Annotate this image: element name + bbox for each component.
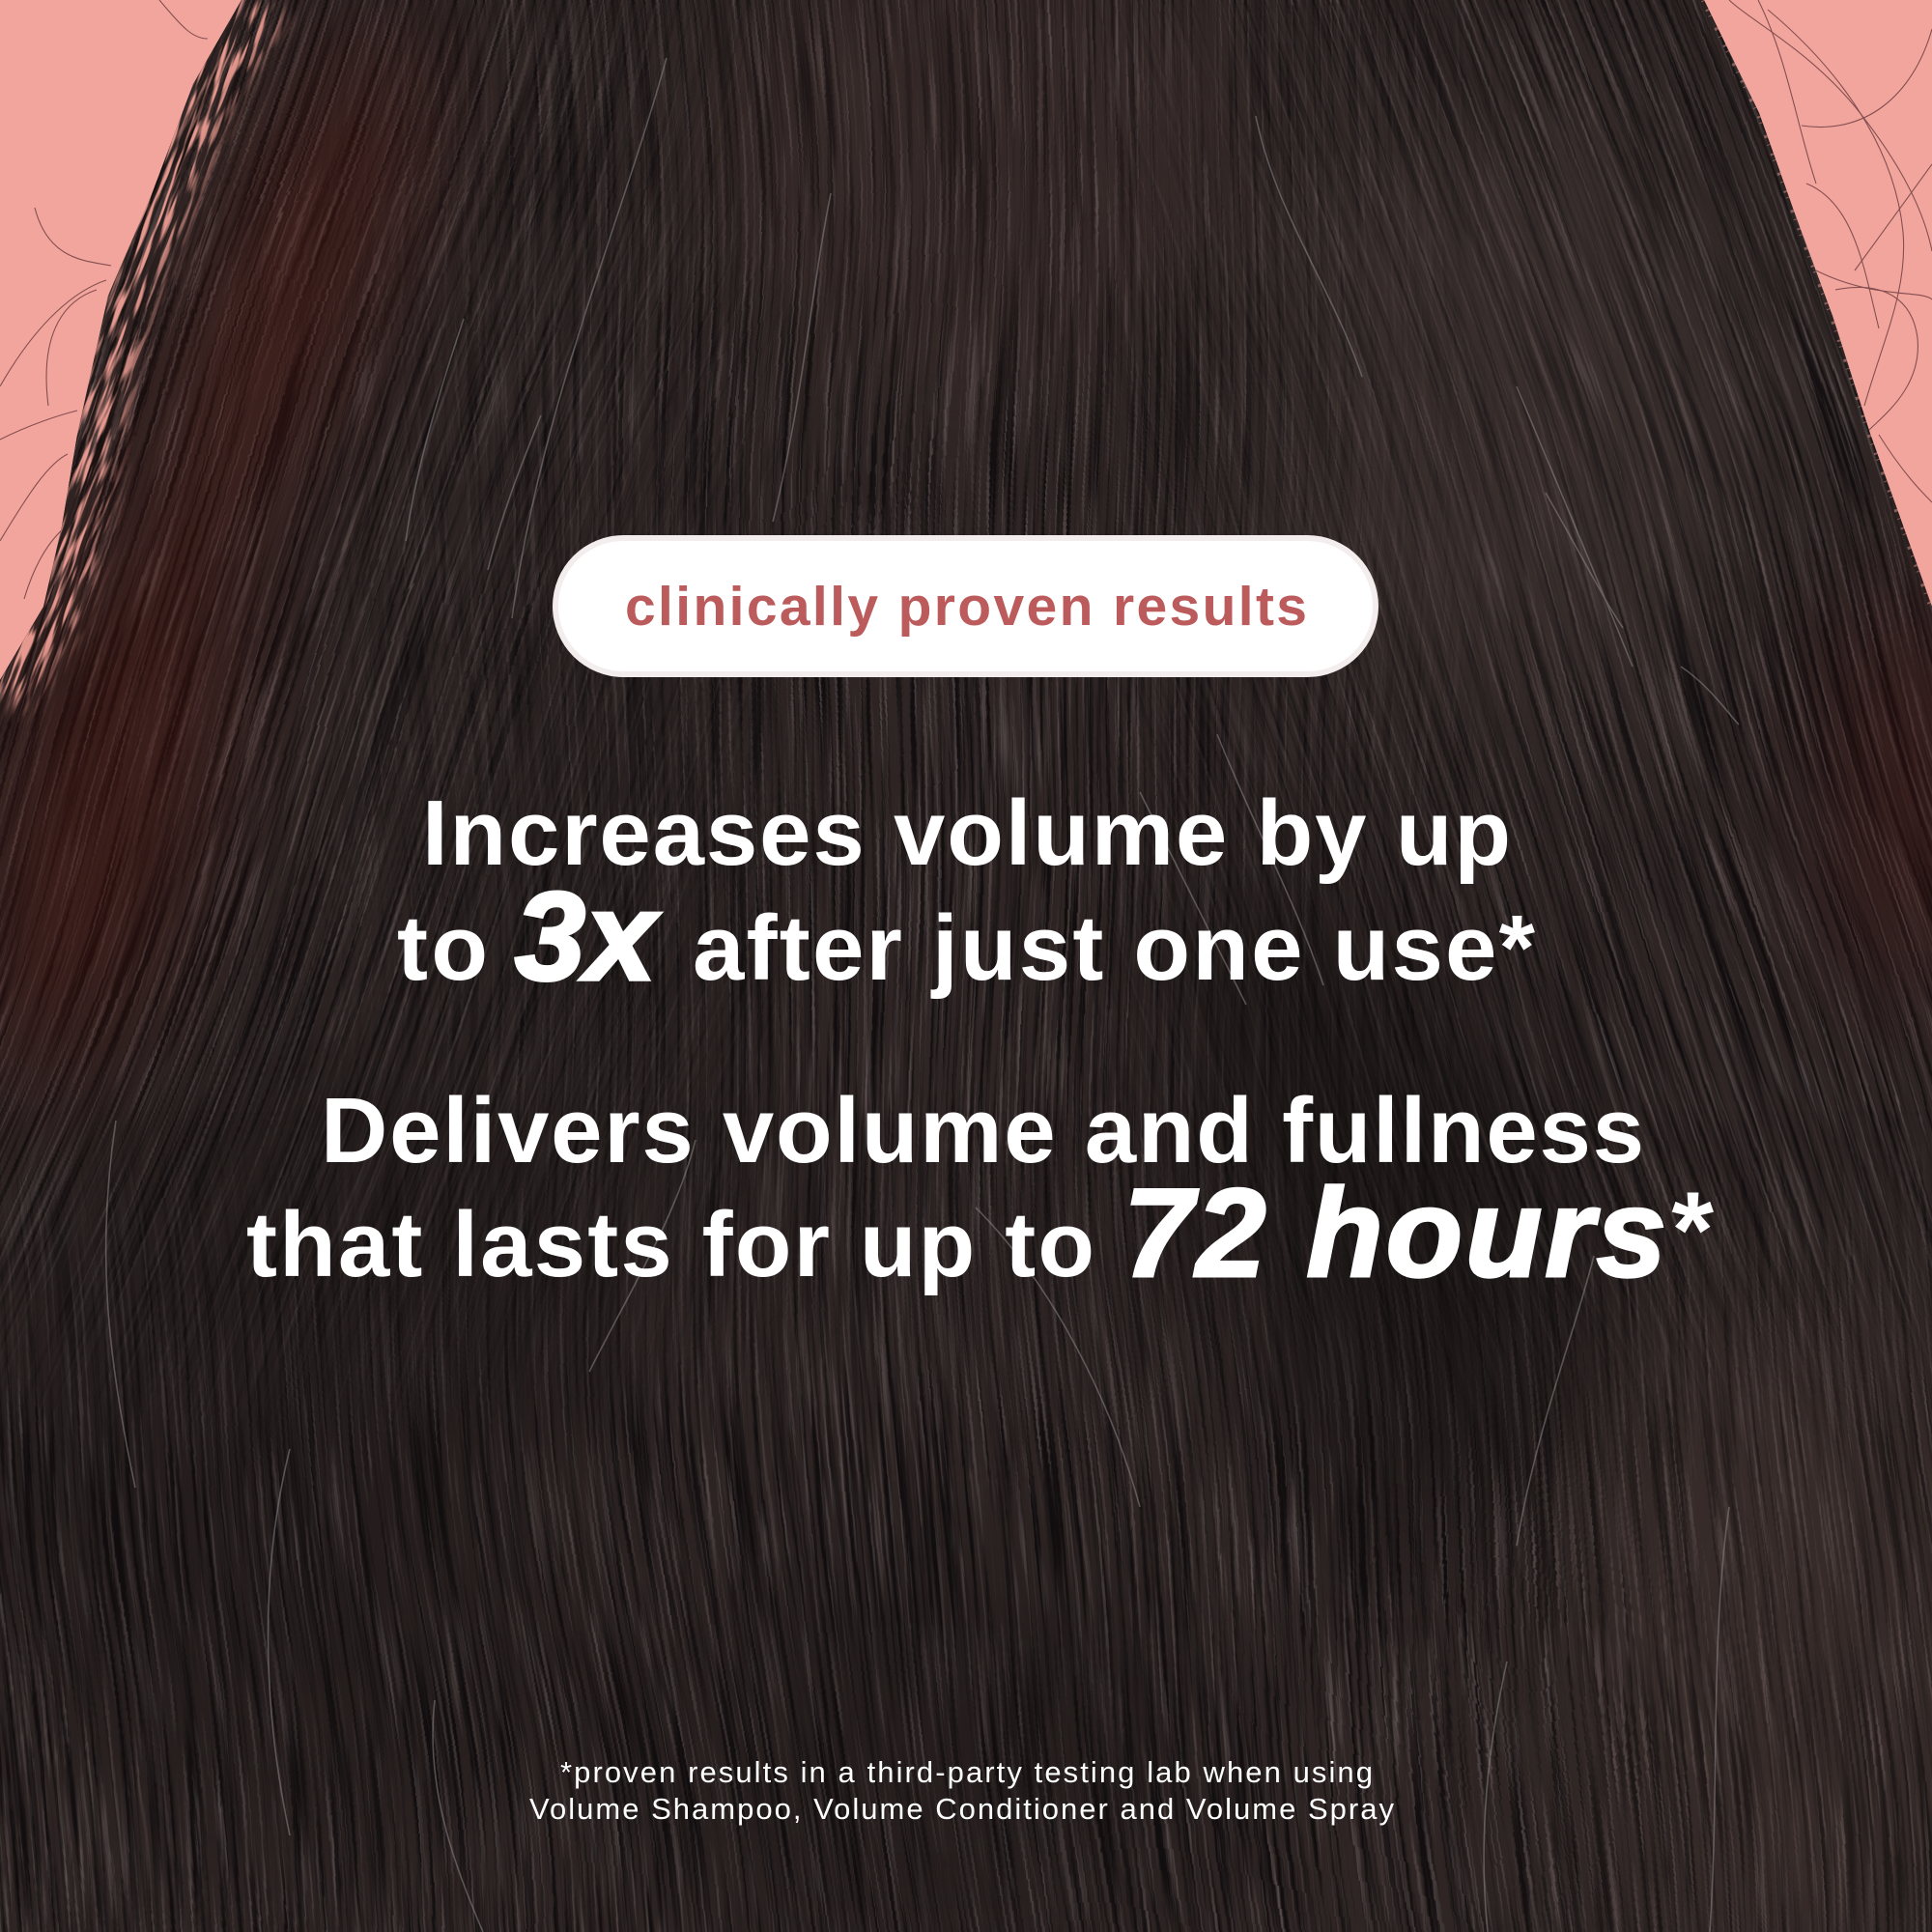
pill outline	[553, 535, 1378, 677]
hair texture: lower strands	[0, 1162, 1932, 1932]
hair texture: centre strands	[0, 0, 1932, 1437]
claim line 1: Increases volume by up	[422, 781, 1511, 885]
claim: 72 hours	[246, 1079, 1714, 1303]
pill label: clinically proven results	[625, 576, 1307, 638]
hair texture: right strands	[1133, 0, 1932, 1391]
claim line 2 lead: to	[397, 896, 488, 1000]
pill fill	[558, 541, 1373, 671]
claim line 3: Delivers volume and fullness	[321, 1079, 1644, 1182]
hair texture: left strands	[0, 0, 747, 1391]
flyaway hairs	[0, 0, 1932, 599]
hair edge: pink showing through left fringe	[0, 0, 580, 734]
claim line 4 lead: that lasts for up to	[246, 1193, 1094, 1296]
claim: 3x volume	[397, 781, 1536, 1007]
footnote line 1: *proven results in a third-party testing lab when using	[560, 1755, 1373, 1789]
highlight: 3x: 3x	[515, 866, 661, 1007]
pill badge	[553, 535, 1378, 677]
footnote	[529, 1755, 1395, 1826]
highlight: 72 hours: 72 hours	[1123, 1162, 1666, 1303]
footnote line 2: Volume Shampoo, Volume Conditioner and Volume Spray	[529, 1792, 1395, 1826]
highlight asterisk: *	[1667, 1170, 1714, 1291]
claim line 2 tail: after just one use*	[693, 896, 1536, 1000]
hair edge: roughened right fringe	[1704, 0, 1932, 607]
